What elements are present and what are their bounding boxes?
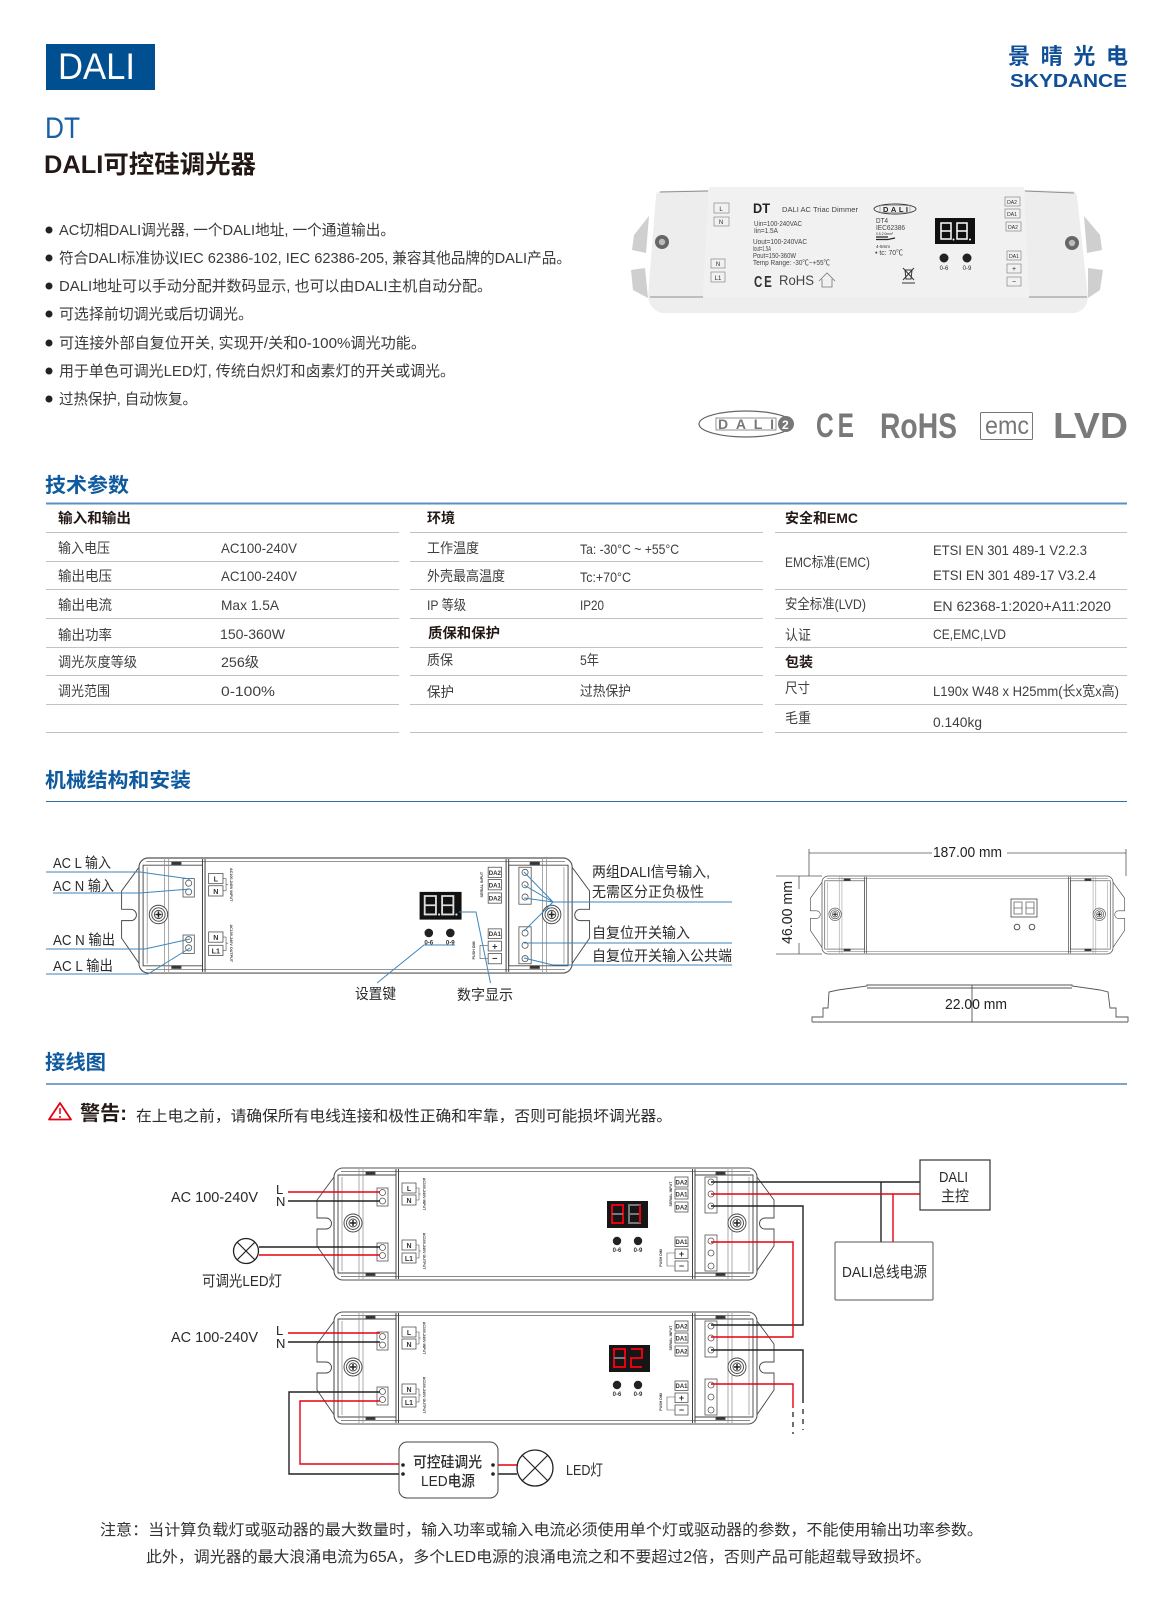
photo: label text: Uin=100-240VAC [754, 219, 802, 228]
wiring: device 2: DA2 [675, 1324, 688, 1330]
wiring: AC input 1 [171, 1182, 285, 1209]
mechanical diagram: device front: 0-9 [446, 939, 455, 946]
icon: warning triangle [49, 1103, 71, 1120]
feature list: 符合DALI标准协议IEC 62386-102, IEC 62386-205, 兼容其他品牌的DALI产品。 [59, 250, 571, 267]
table column: safety, EMC and package: EMC标准(EMC) [785, 554, 870, 570]
wiring: device 1: AC100-240V INPUT [422, 1178, 426, 1211]
photo: label text [753, 200, 905, 290]
mechanical diagram: bottom labels [355, 986, 513, 1004]
table column: input and output [58, 510, 298, 699]
feature list [46, 222, 571, 408]
photo: label text: CE [754, 272, 772, 290]
mechanical diagram: left labels [53, 855, 115, 975]
logo: CE: CE [816, 407, 854, 445]
dimension drawing: top view [776, 844, 1126, 954]
wiring: device 2: PUSH DIM [659, 1393, 663, 1411]
wiring: black wires [259, 1182, 920, 1474]
table column: input and output: 调光灰度等级 [58, 654, 137, 670]
feature list: 可选择前切调光或后切调光。 [59, 306, 253, 323]
wiring: AC input 2: N [276, 1336, 285, 1351]
note [100, 1520, 983, 1566]
warning: 在上电之前，请确保所有电线连接和极性正确和牢靠，否则可能损坏调光器。 [136, 1108, 672, 1125]
mechanical diagram: right labels: 自复位开关输入 [592, 924, 690, 942]
wiring: device 1: + [679, 1249, 684, 1259]
photo: dali logo: DALI [883, 205, 908, 214]
table column: environment and warranty: Tc:+70°C [580, 569, 631, 585]
photo: recycling bin icon [902, 268, 915, 283]
photo: buttons: 0-9 [963, 266, 972, 272]
digital display [609, 1345, 650, 1372]
product title: DALI可控硅调光器 [44, 151, 256, 179]
wiring: device 1: SERIAL INPUT [669, 1181, 673, 1206]
wiring: device 1: DA1 [675, 1240, 688, 1246]
table column: environment and warranty: 保护 [427, 684, 454, 700]
table column: environment and warranty: IP 等级 [427, 597, 466, 613]
wiring: device 2: L1 [405, 1400, 413, 1407]
wiring: device 2: SERIAL INPUT [669, 1325, 673, 1350]
mechanical diagram: left labels: AC L 输出 [53, 958, 113, 975]
logo: emc: emc [985, 412, 1029, 440]
wiring: device 1: DA2 [675, 1180, 688, 1186]
digital display [607, 1201, 648, 1228]
wiring: device 2: + [679, 1393, 684, 1403]
table column: safety, EMC and package: 认证 [785, 627, 811, 643]
wiring: AC input 2: AC 100-240V [171, 1329, 258, 1346]
wiring: red wires [259, 1192, 920, 1465]
photo: dali logo [874, 204, 916, 214]
wiring: device 2 [317, 1312, 774, 1424]
mechanical diagram: device front: DA2 [489, 896, 502, 903]
warning [49, 1102, 672, 1125]
wiring: device 2: DA1 [675, 1384, 688, 1390]
wiring: device 1: L [407, 1186, 412, 1193]
section heading: 机械结构和安装: 机械结构和安装 [45, 769, 191, 792]
wiring: device 1: L1 [405, 1256, 413, 1263]
dimension drawing: side view: 22.00 mm [945, 996, 1007, 1013]
table column: environment and warranty: 质保 [427, 652, 453, 668]
logo: DALI 2: DALI [718, 416, 774, 432]
mechanical diagram: left labels: AC L 输入 [53, 855, 111, 872]
table column: safety, EMC and package: ETSI EN 301 489-17 V3.2.4 [933, 567, 1096, 583]
photo: label text: 0.5-2.0mm² [876, 231, 894, 236]
certification logos [699, 405, 1128, 446]
table column: environment and warranty: Ta: -30°C ~ +55°C [580, 541, 679, 557]
wiring: device 2: 0-9 [634, 1392, 643, 1398]
wiring: DALI master box: DALI [939, 1169, 968, 1186]
mechanical diagram: device front: N [213, 888, 218, 896]
wiring: device 1: AC100-240V OUTPUT [422, 1233, 426, 1270]
wiring: LED lamp: LED灯 [566, 1462, 603, 1479]
photo: label text: Uout=100-240VAC [753, 237, 807, 246]
wiring: device 2: L [407, 1330, 412, 1337]
photo: terminal labels: + [1012, 266, 1016, 273]
table column: safety, EMC and package: 0.140kg [933, 714, 982, 730]
table column: environment and warranty: 工作温度 [427, 540, 479, 556]
wiring: DALI master box [920, 1160, 990, 1210]
photo: terminal labels: DA2 [1007, 200, 1017, 206]
table column: safety, EMC and package [785, 510, 1119, 730]
table column: input and output: 输出功率 [58, 627, 112, 643]
wiring: device 1: DA2 [675, 1206, 688, 1212]
wiring: triac LED driver: 可控硅调光 [413, 1454, 482, 1471]
category badge: DALI: DALI [58, 46, 135, 87]
photo: terminal labels: DA2 [1008, 225, 1018, 231]
wiring: device 1 [317, 1168, 774, 1280]
table column: input and output: 150-360W [220, 626, 286, 642]
warning: 警告: [80, 1102, 127, 1125]
category badge: DALI [46, 44, 155, 90]
photo: buttons [940, 254, 972, 272]
section heading: 技术参数: 技术参数 [45, 473, 129, 497]
wiring: device 2: AC100-240V INPUT [422, 1322, 426, 1355]
model name: DT [45, 112, 80, 145]
wiring: device 1: N [406, 1198, 412, 1205]
wiring: continuation dashes [793, 1409, 803, 1434]
mechanical diagram: bottom labels: 数字显示 [457, 987, 513, 1004]
mechanical diagram: device front: AC100-240V OUTPUT [229, 924, 233, 963]
mechanical diagram: device front: N [213, 934, 218, 942]
mechanical diagram: device front: 0-6 [424, 939, 434, 946]
mechanical diagram: device front: − [492, 954, 498, 964]
note: 此外，调光器的最大浪涌电流为65A，多个LED电源的浪涌电流之和不要超过2倍，否则产品可能超载导致损坏。 [146, 1548, 931, 1566]
wiring: AC input 2 [171, 1323, 285, 1351]
mechanical diagram: device front [122, 858, 590, 973]
logo: RoHS: RoHS [880, 407, 957, 446]
wiring: device 1: − [679, 1261, 684, 1271]
photo: house icon [819, 273, 835, 287]
photo: terminal labels: DA1 [1009, 254, 1019, 260]
mechanical diagram: right labels: 自复位开关输入公共端 [592, 947, 732, 965]
photo: terminal labels: N [716, 262, 720, 268]
photo: wire icon [876, 237, 895, 240]
table column: environment and warranty: 过热保护 [580, 683, 631, 699]
table column: safety, EMC and package: CE,EMC,LVD [933, 626, 1006, 642]
mechanical diagram: right labels [592, 864, 732, 965]
photo: terminal labels: DA1 [1007, 212, 1017, 218]
digital display [420, 892, 462, 920]
wiring: device 2: AC100-240V OUTPUT [422, 1377, 426, 1414]
wiring: DALI bus power box [835, 1242, 933, 1300]
photo: buttons: 0-6 [940, 266, 949, 272]
mechanical diagram: device front: PUSH DIM [472, 941, 476, 959]
wiring: device 2: N [406, 1387, 412, 1394]
wiring: DALI bus power box: DALI总线电源 [842, 1264, 927, 1281]
table column: safety, EMC and package: 安全和EMC [785, 510, 858, 526]
wiring: device 1: DA1 [675, 1192, 688, 1198]
brand logo: 景晴光电 [1008, 44, 1128, 69]
table column: input and output: Max 1.5A [221, 597, 280, 613]
photo: terminal labels: L1 [715, 276, 722, 282]
mechanical diagram: device front: AC100-240V INPUT [229, 868, 233, 902]
table column: environment and warranty [427, 510, 679, 700]
table column: safety, EMC and package: 毛重 [785, 710, 811, 726]
photo: label text: Iout=1.5A [753, 244, 771, 253]
photo: terminal labels: L [719, 207, 723, 213]
mechanical diagram: right labels: 无需区分正负极性 [592, 884, 704, 901]
mechanical diagram: left labels: AC N 输入 [53, 878, 114, 895]
photo: label text: 4-5mm [876, 244, 890, 249]
table column: environment and warranty: IP20 [580, 597, 604, 613]
wiring: triac LED driver: LED电源 [421, 1473, 475, 1490]
feature list: AC切相DALI调光器, 一个DALI地址, 一个通道输出。 [59, 222, 395, 239]
wiring: device 2: DA2 [675, 1350, 688, 1356]
wiring: device 2: DA1 [675, 1336, 688, 1342]
table column: environment and warranty: 质保和保护 [428, 625, 500, 641]
wiring: device 2: 0-6 [613, 1392, 622, 1398]
photo: label text: Temp Range: -30℃~+55℃ [753, 258, 830, 267]
table column: environment and warranty: 环境 [427, 510, 455, 526]
dimension display [1011, 899, 1037, 930]
mechanical diagram: device front: DA2 [489, 870, 502, 877]
wiring: device 2: − [679, 1405, 684, 1415]
table column: input and output: 0-100% [221, 683, 275, 699]
mechanical diagram: bottom labels: 设置键 [355, 986, 396, 1003]
mechanical diagram: device front: L1 [212, 948, 220, 956]
table column: input and output: AC100-240V [221, 540, 298, 556]
photo: label text: IEC62386 [876, 223, 905, 232]
wiring: device 1: 0-6 [613, 1248, 622, 1254]
mechanical diagram: device front: + [492, 941, 498, 951]
wiring: dimmable LED lamp [202, 1238, 282, 1290]
table column: input and output: 输出电流 [58, 597, 112, 613]
mechanical diagram: leader lines [46, 872, 732, 983]
mechanical diagram: device front: SERIAL INPUT [480, 871, 484, 897]
wiring: triac LED driver [399, 1442, 498, 1498]
mechanical diagram: device front: DA1 [489, 882, 502, 889]
photo: terminal labels [711, 197, 1021, 286]
dimension drawing: top view: 46.00 mm [779, 881, 796, 944]
section heading: 接线图: 接线图 [45, 1051, 106, 1074]
photo: terminal labels: N [719, 220, 723, 226]
mechanical diagram: device front: DA1 [489, 931, 502, 938]
mechanical diagram: right labels: 两组DALI信号输入, [592, 864, 710, 881]
photo: terminal labels: − [1012, 279, 1016, 286]
brand logo: SKYDANCE [1010, 71, 1127, 91]
dimension drawing: top view: 187.00 mm [933, 844, 1002, 861]
table column: input and output: 256级 [221, 654, 259, 670]
table column: environment and warranty: 外壳最高温度 [427, 568, 505, 584]
photo: label text: RoHS [779, 273, 814, 288]
wiring: DALI master box: 主控 [941, 1188, 969, 1205]
table column: safety, EMC and package: 尺寸 [785, 680, 810, 696]
brand logo [1008, 44, 1128, 91]
table column: safety, EMC and package: L190x W48 x H25mm(长x宽x高) [933, 683, 1119, 699]
dimension drawing: side view [812, 985, 1128, 1022]
wiring: LED lamp [517, 1450, 603, 1486]
wiring: device 1: 0-9 [634, 1248, 643, 1254]
photo: label text: DALI AC Triac Dimmer [782, 205, 858, 214]
feature list: 过热保护, 自动恢复。 [59, 390, 197, 408]
wiring: AC input 1: AC 100-240V [171, 1189, 258, 1206]
wiring: device 2: N [406, 1342, 412, 1349]
wiring: AC input 2: L [276, 1323, 283, 1338]
photo: label text: DT [753, 200, 770, 216]
table column: safety, EMC and package: 包装 [785, 654, 813, 670]
photo: label text: ▪ tc: 70℃ [875, 248, 903, 257]
table column: input and output: 输入电压 [58, 540, 110, 556]
feature list: 可连接外部自复位开关, 实现开/关和0-100%调光功能。 [59, 334, 426, 352]
table column: input and output: 输入和输出 [58, 510, 131, 526]
wiring: device 1: N [406, 1243, 412, 1250]
logo: DALI 2: 2 [782, 418, 789, 432]
feature list: DALI地址可以手动分配并数码显示, 也可以由DALI主机自动分配。 [59, 278, 492, 295]
photo: label text: Pout=150-360W [753, 251, 797, 260]
table column: safety, EMC and package: ETSI EN 301 489-1 V2.2.3 [933, 542, 1087, 558]
logo: LVD: LVD [1053, 405, 1128, 446]
photo: digital display [935, 218, 975, 244]
mechanical diagram: left labels: AC N 输出 [53, 932, 115, 949]
wiring: device 1: PUSH DIM [659, 1249, 663, 1267]
table column: input and output: 调光范围 [58, 683, 110, 699]
spec table [46, 510, 1127, 732]
wiring: dimmable LED lamp: 可调光LED灯 [202, 1273, 282, 1290]
wiring: AC input 1: L [276, 1182, 283, 1197]
table column: input and output: 输出电压 [58, 568, 112, 584]
table column: input and output: AC100-240V [221, 568, 298, 584]
feature list: 用于单色可调光LED灯, 传统白炽灯和卤素灯的开关或调光。 [59, 363, 455, 380]
product photo [631, 187, 1103, 313]
photo: label text: DT4 [876, 216, 888, 225]
table column: environment and warranty: 5年 [580, 652, 599, 668]
wiring: AC input 1: N [276, 1194, 285, 1209]
table column: safety, EMC and package: 安全标准(LVD) [785, 596, 866, 612]
table column: safety, EMC and package: EN 62368-1:2020+A11:2020 [933, 598, 1111, 614]
photo: label text: Iin=1.5A [754, 226, 778, 235]
logo: DALI 2 [699, 411, 794, 437]
note: 注意：当计算负载灯或驱动器的最大数量时，输入功率或输入电流必须使用单个灯或驱动器的参数，不能使用输出功率参数。 [100, 1520, 983, 1539]
mechanical diagram: device front: L [214, 876, 219, 884]
